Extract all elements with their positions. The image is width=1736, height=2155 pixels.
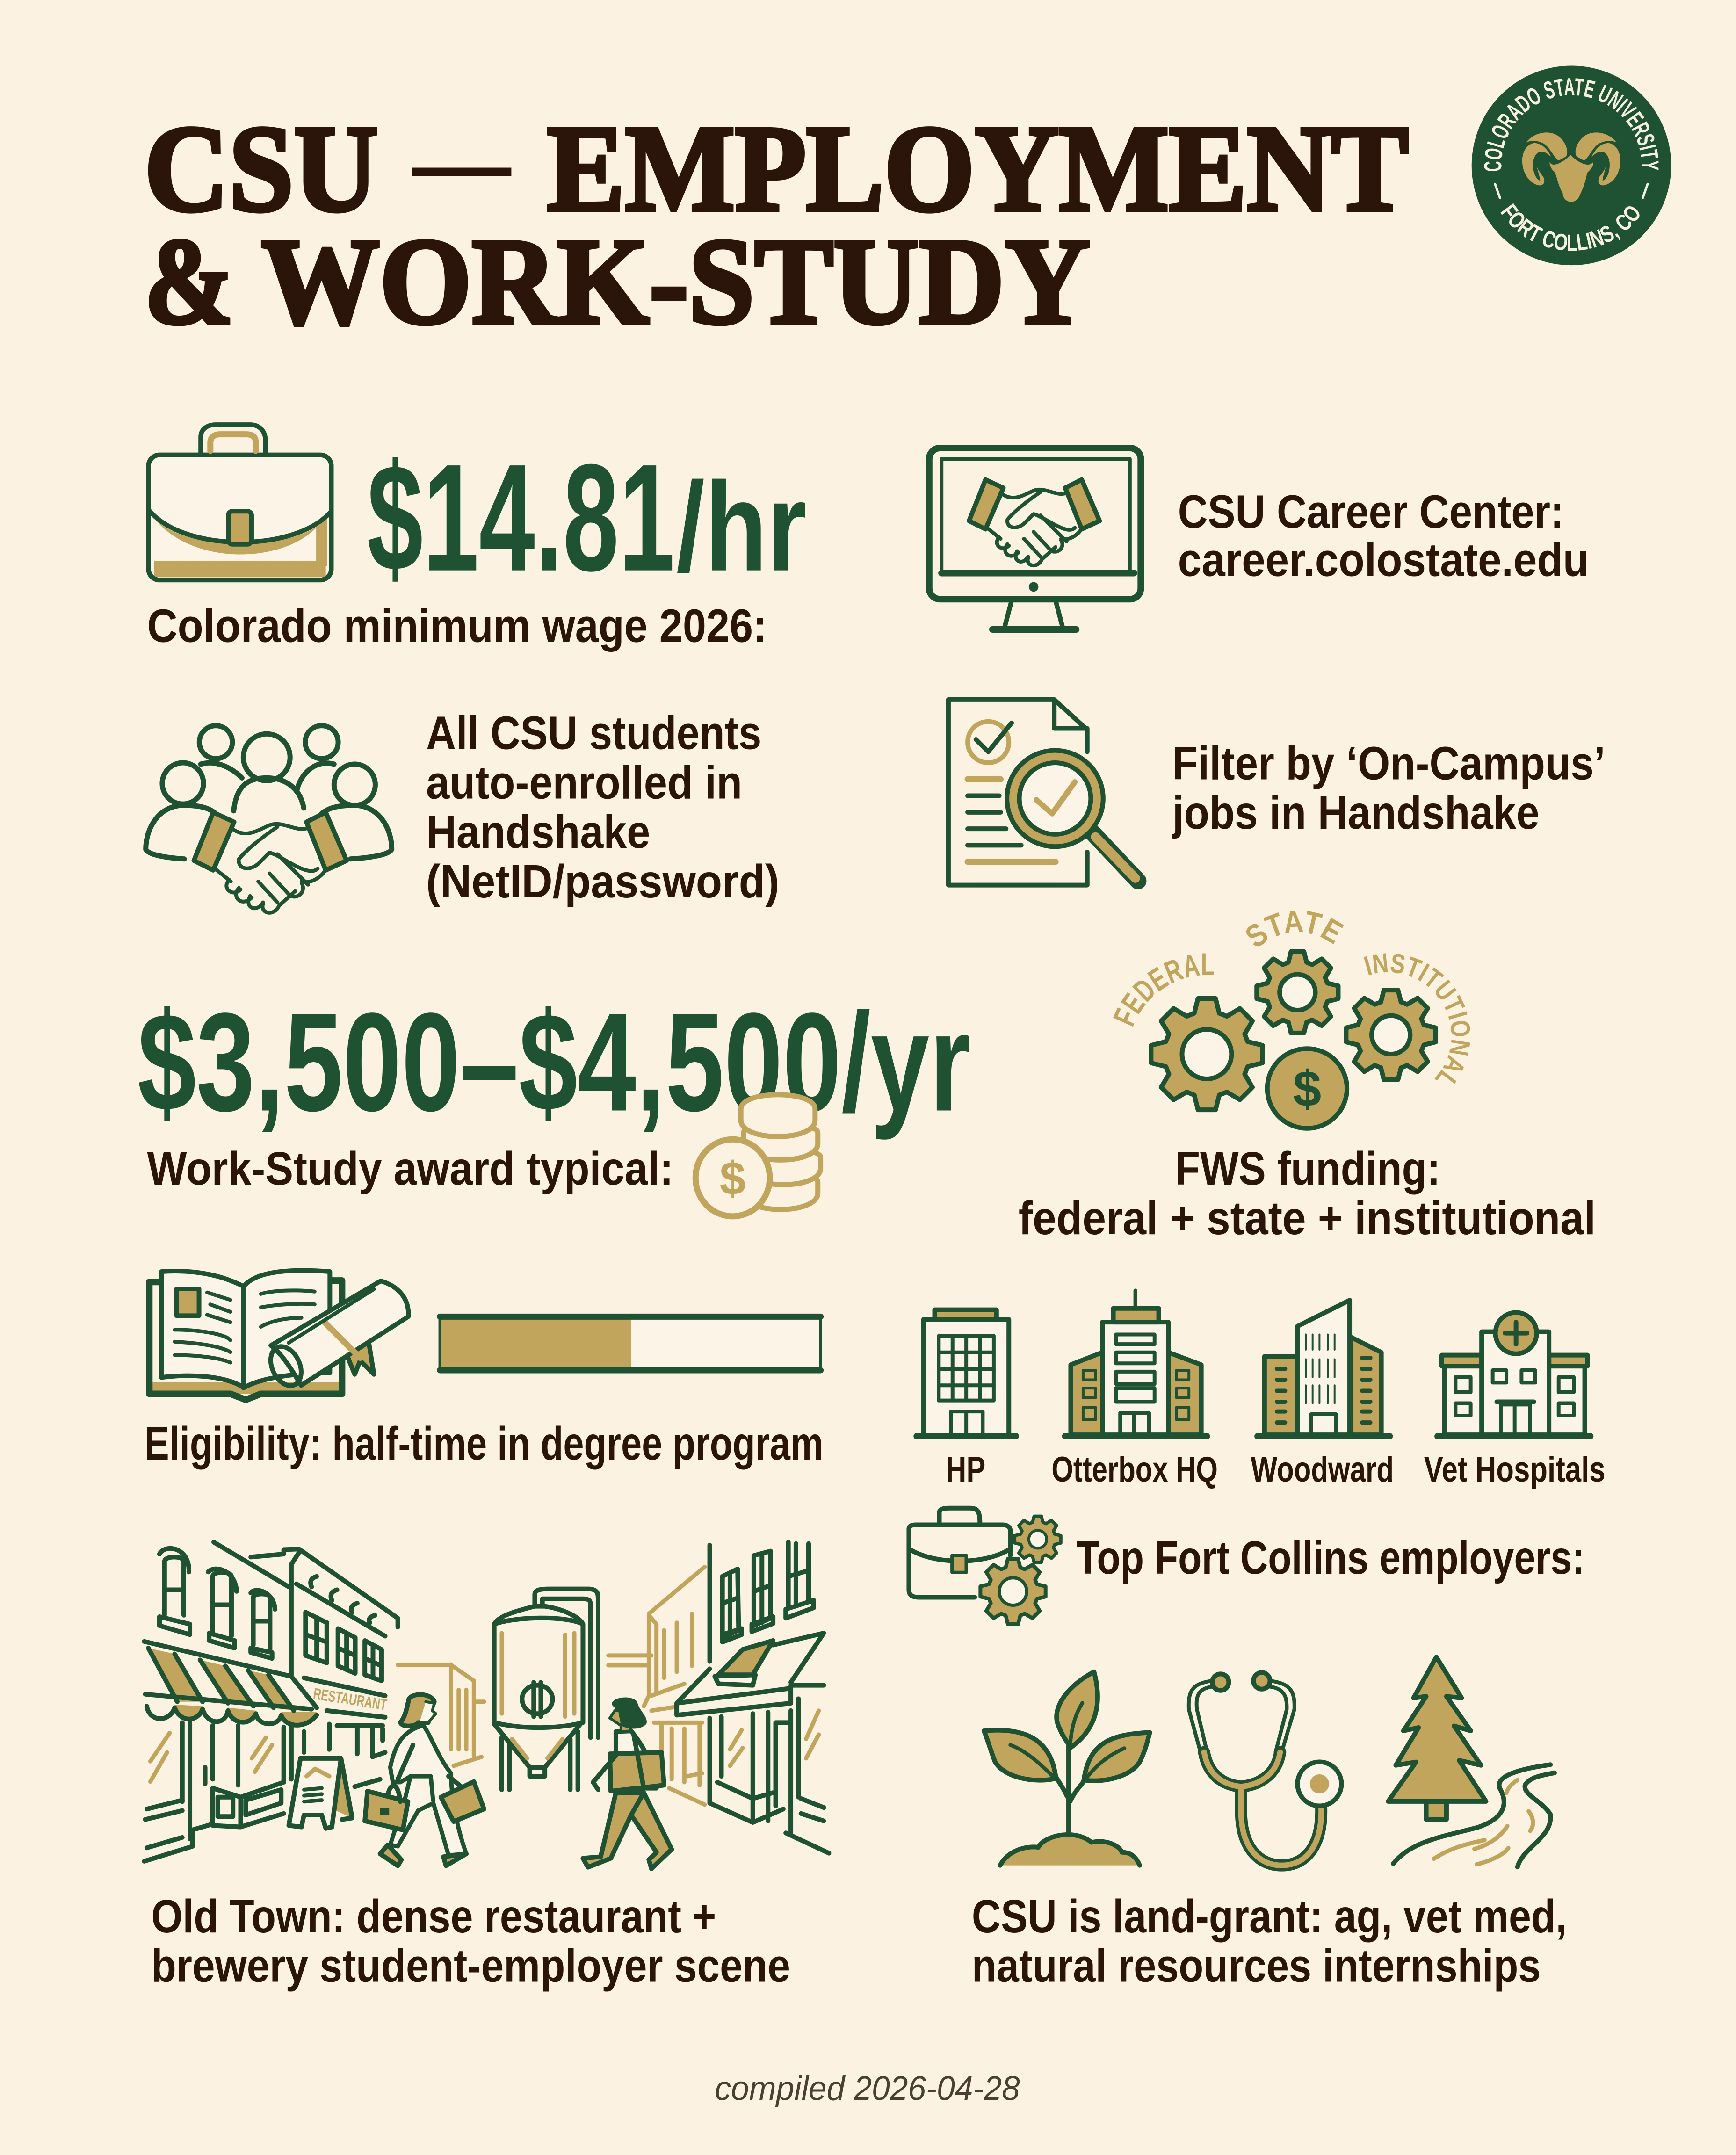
illustration: Old Town street scene: [144, 1542, 829, 1869]
icon: Vet Hospitals building: [1438, 1313, 1590, 1436]
text: career center: [1178, 486, 1589, 586]
title: &: [145, 213, 234, 350]
icon: HP building: [917, 1310, 1016, 1436]
title: EMPLOYMENT: [547, 101, 1409, 238]
figure: walking woman with bags: [365, 1694, 484, 1866]
text: Old Town: brewery student-employer scene: [151, 1940, 790, 1992]
text: career center: CSU Career Center:: [1178, 486, 1564, 538]
icon: monitor with handshake: [929, 448, 1141, 629]
icon: book and diploma: [149, 1271, 342, 1400]
stat: minimum wage: $14.81: [367, 433, 675, 603]
icon: briefcase: [149, 425, 331, 580]
text: land-grant: natural resources internships: [972, 1940, 1541, 1992]
icon: plant: [984, 1672, 1150, 1866]
label: work-study award: Work-Study award typical:: [147, 1143, 673, 1195]
label: Woodward: Woodward: [1251, 1450, 1394, 1490]
text: handshake enrolment: [426, 708, 779, 908]
text: filter on-campus: [1172, 738, 1606, 839]
label: Otterbox HQ: Otterbox HQ: [1051, 1450, 1218, 1490]
label: minimum wage: Colorado minimum wage 2026:: [147, 600, 767, 652]
label: federal: FEDERAL: [1107, 947, 1215, 1031]
text: FWS funding: FWS funding:: [1175, 1143, 1440, 1195]
label: top employers: Top Fort Collins employers:: [1076, 1532, 1585, 1584]
left building: [159, 1542, 398, 1757]
stat: minimum wage: /hr: [676, 456, 807, 598]
seal: Colorado State University: FORT COLLINS, CO: [1496, 199, 1646, 256]
icon: diploma: [265, 1281, 408, 1391]
title: [145, 101, 1409, 350]
label: state: STATE: [1239, 904, 1348, 955]
title: WORK-STUDY: [261, 213, 1090, 350]
icon: coin stack: [695, 1095, 821, 1216]
icon: ram head: [1522, 132, 1620, 202]
text: filter on-campus: Filter by ‘On-Campus’: [1172, 738, 1606, 789]
seal: Colorado State University: [1472, 65, 1671, 265]
figure: walking woman with book: [583, 1697, 672, 1869]
background buildings: [398, 1567, 705, 1805]
icon: briefcase with gears: [909, 1508, 1061, 1624]
icon: funding gears: $: [1293, 1061, 1321, 1118]
text: career center: career.colostate.edu: [1178, 534, 1589, 586]
icon: pine tree and river: [1388, 1657, 1555, 1867]
icon: stethoscope: [1189, 1672, 1341, 1866]
footer: compiled date: compiled 2026-04-28: [715, 2068, 1020, 2107]
text: land-grant: CSU is land-grant: ag, vet med,: [972, 1891, 1567, 1943]
icon: coin stack: $: [720, 1153, 745, 1205]
icon: people with handshake: [146, 726, 392, 913]
text: handshake enrolment: (NetID/password): [426, 856, 779, 908]
text: handshake enrolment: Handshake: [426, 806, 650, 858]
icon: Woodward building: [1258, 1300, 1389, 1436]
label: institutional: INSTITUTIONAL: [1361, 948, 1476, 1094]
text: handshake enrolment: All CSU students: [426, 708, 761, 759]
text: filter on-campus: jobs in Handshake: [1172, 787, 1540, 839]
progress bar: half-time: [440, 1316, 821, 1370]
awning: [144, 1642, 317, 1725]
brew tank: [494, 1589, 598, 1790]
icon: Otterbox HQ building: [1065, 1291, 1207, 1436]
title: CSU: [145, 101, 378, 238]
label: Vet Hospitals: Vet Hospitals: [1424, 1450, 1606, 1490]
text: FWS funding: [1019, 1143, 1596, 1244]
storefront: [144, 1722, 380, 1861]
text: FWS funding: federal + state + institutional: [1019, 1193, 1596, 1244]
right building: [677, 1542, 829, 1853]
text: Old Town: Old Town: dense restaurant +: [151, 1891, 716, 1943]
text: handshake enrolment: auto-enrolled in: [426, 757, 742, 809]
label: eligibility: Eligibility: half-time in degree program: [145, 1418, 823, 1470]
label: HP: HP: [946, 1450, 985, 1490]
seal: Colorado State University: COLORADO STATE UNIVERSITY: [1479, 73, 1664, 172]
icon: funding gears: [1107, 904, 1476, 1128]
sandwich board: [289, 1758, 352, 1829]
icon: document with magnifier: [948, 700, 1138, 885]
sign text: restaurant: RESTAURANT: [312, 1685, 388, 1714]
text: land-grant: [972, 1891, 1567, 1992]
stat: work-study award: $3,500–$4,500/yr: [137, 984, 970, 1141]
text: Old Town: [151, 1891, 790, 1992]
